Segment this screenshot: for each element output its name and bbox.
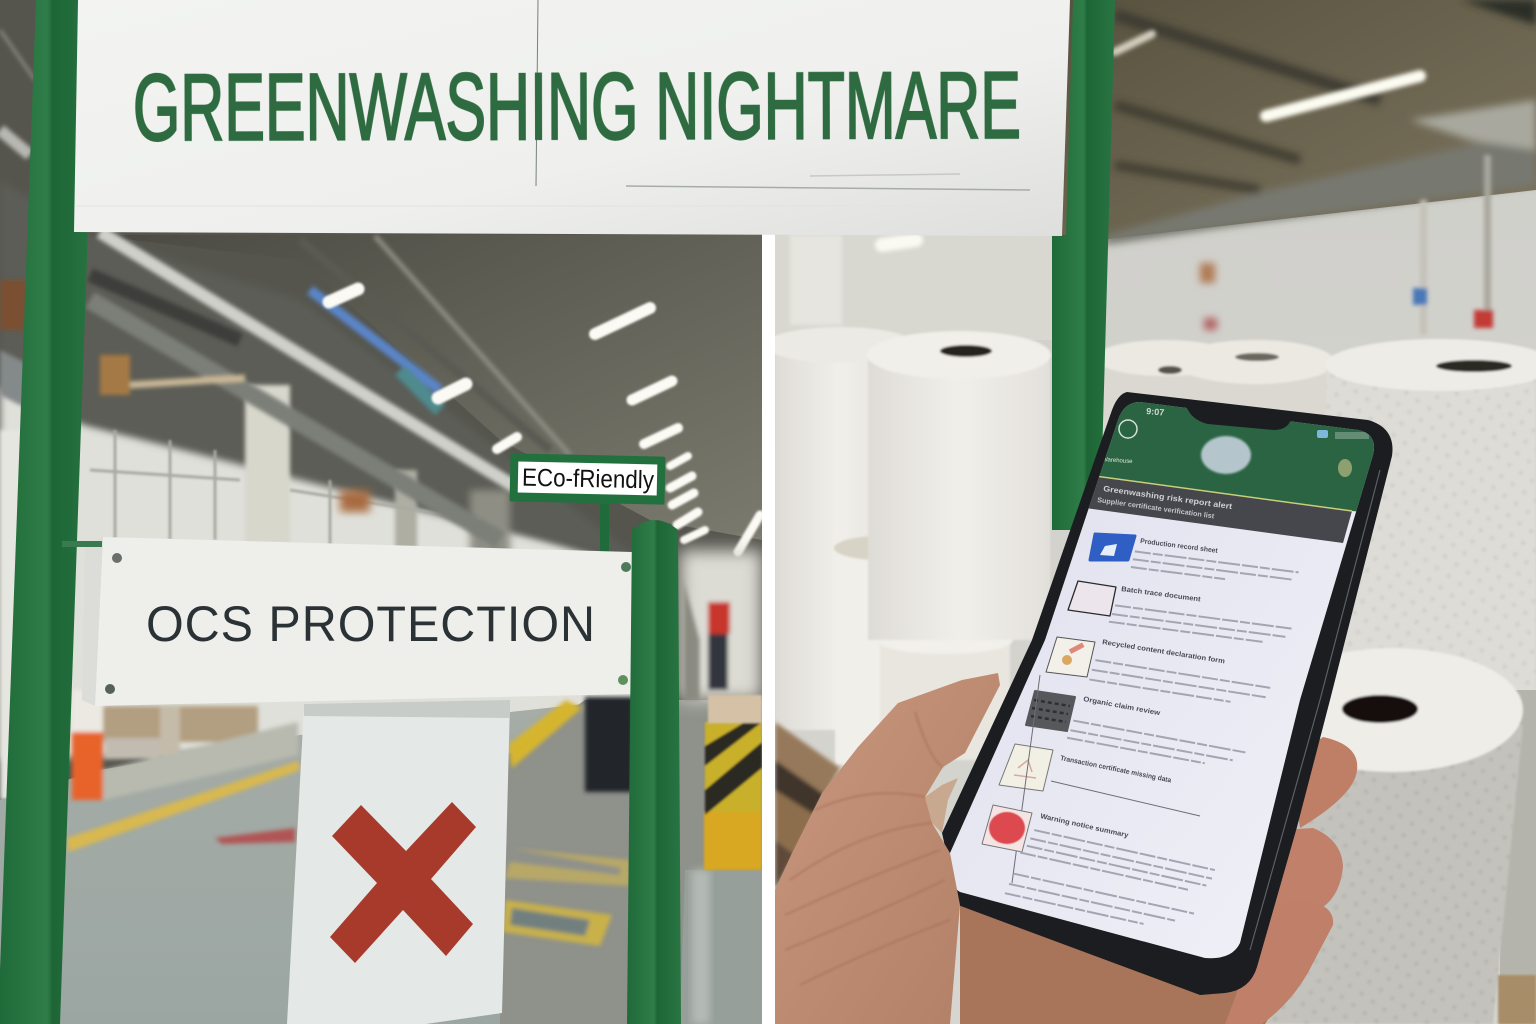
row 5 icon bbox=[999, 744, 1053, 791]
far right background below roll bbox=[1500, 690, 1536, 1024]
smartphone bbox=[940, 392, 1400, 995]
row separator and rule bbox=[1012, 675, 1200, 883]
row 6 text bbox=[1005, 809, 1219, 936]
sign text: ECo-fRiendly bbox=[522, 464, 655, 494]
factory background bbox=[0, 0, 762, 800]
aisle details bbox=[67, 550, 762, 946]
row 3 text bbox=[1089, 638, 1274, 708]
row 1 text: Production record sheet bbox=[1140, 538, 1219, 555]
OCS protection sign bbox=[62, 537, 632, 706]
ceiling lights bbox=[329, 289, 760, 552]
hanging X sign bbox=[287, 700, 510, 1024]
row 2 text bbox=[1109, 585, 1296, 646]
left photo: factory aisle bbox=[0, 0, 762, 1024]
yellow forklift bbox=[704, 695, 762, 870]
warehouse background bbox=[775, 0, 1536, 1024]
row 4 text: Organic claim review bbox=[1083, 696, 1161, 717]
phone list rows bbox=[982, 534, 1300, 936]
paper rolls bbox=[765, 327, 1340, 765]
status bar text: 9:07 bbox=[1146, 406, 1165, 418]
row 6 text: Warning notice summary bbox=[1040, 813, 1129, 839]
icon: red X bbox=[330, 802, 476, 963]
floor bbox=[0, 704, 578, 1024]
thumb and palm over phone bbox=[775, 673, 1000, 1024]
phone screen: Supplier certificate verification list bbox=[1097, 497, 1215, 520]
row 4 icon bbox=[1026, 691, 1075, 731]
row 3 text: Recycled content declaration form bbox=[1102, 639, 1225, 665]
row 2 icon bbox=[1068, 581, 1116, 616]
row 5 text: Transaction certificate missing data bbox=[1060, 755, 1172, 785]
row 1 icon bbox=[1090, 534, 1135, 560]
sign text: OCS PROTECTION bbox=[146, 596, 596, 652]
white divider bbox=[762, 235, 775, 1024]
app logo text: Warehouse bbox=[1102, 457, 1133, 465]
large roll upper right bbox=[1328, 338, 1536, 690]
phone notch bbox=[1185, 403, 1292, 430]
green post: right background bbox=[1052, 0, 1115, 530]
row 1 text bbox=[1131, 537, 1300, 588]
title text: GREENWASHING NIGHTMARE bbox=[133, 53, 1021, 161]
row 3 icon bbox=[1046, 637, 1095, 677]
app header bbox=[1099, 402, 1374, 512]
row 6 icon bbox=[982, 805, 1032, 852]
warehouse lights bbox=[882, 34, 1420, 245]
row 2 text: Batch trace document bbox=[1121, 586, 1202, 604]
fingers behind phone bbox=[960, 737, 1357, 1024]
sign pole bbox=[600, 504, 609, 552]
green post: left bbox=[0, 0, 96, 1024]
eco-friendly sign bbox=[510, 453, 665, 505]
wooden pallet bbox=[775, 722, 840, 890]
right photo: paper rolls warehouse bbox=[765, 0, 1536, 1024]
row 4 text bbox=[1067, 694, 1250, 770]
phone screen bbox=[950, 402, 1374, 958]
large roll lower right bbox=[1255, 648, 1536, 1024]
green post: front bbox=[627, 520, 681, 1024]
title banner bbox=[74, 0, 1070, 236]
header text: Greenwashing risk report alert bbox=[1103, 484, 1233, 511]
overhead pipes bbox=[0, 30, 570, 540]
phone body bbox=[942, 392, 1392, 995]
